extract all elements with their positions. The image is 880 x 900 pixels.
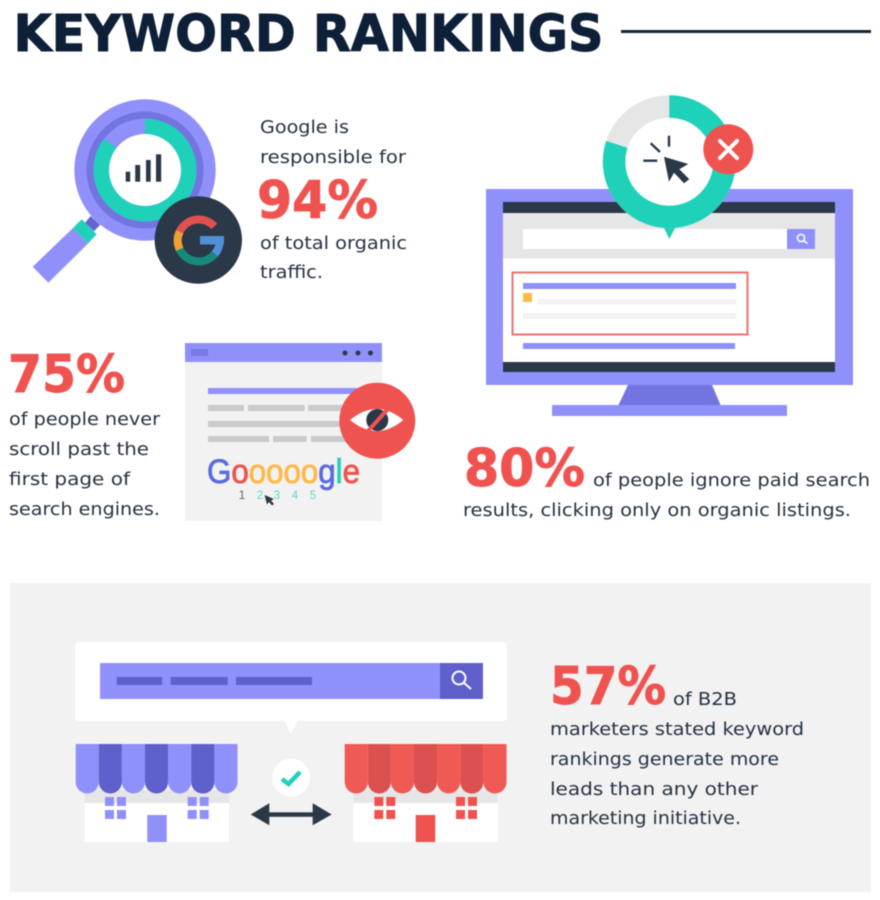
highlighted paid result [512, 272, 748, 334]
red storefront [345, 744, 506, 842]
red close badge [703, 124, 753, 174]
text block: 75% stat: 75% [8, 345, 125, 405]
bar chart glyph [126, 154, 161, 182]
text block: 57% stat: of B2B [673, 689, 737, 710]
browser header [185, 343, 382, 362]
small cursor [264, 495, 274, 506]
text block: 57% stat: marketing initiative. [550, 808, 741, 829]
text block: 75% stat: of people never [9, 409, 161, 430]
text block: 80% stat: 80% [464, 439, 585, 499]
text block: 94% stat: Google is [260, 117, 349, 138]
icon: browser window with pagination [185, 343, 415, 521]
text block: 75% stat: search engines. [9, 499, 160, 520]
double arrow [251, 803, 332, 825]
text block: 75% stat [8, 345, 161, 520]
text block: 94% stat: traffic. [260, 262, 323, 283]
cursor arrow [643, 136, 689, 183]
text block: 57% stat [550, 657, 804, 829]
browser body [185, 343, 382, 521]
panel background [10, 583, 871, 892]
text block: 75% stat: first page of [9, 469, 131, 490]
search speech bubble [75, 642, 507, 734]
magnifier handle [33, 216, 100, 283]
icon: monitor with search results [486, 189, 853, 416]
icon: magnifier with Google badge [33, 99, 242, 284]
text block: 80% stat: results, clicking only on organic listings. [463, 500, 851, 521]
page numbers [239, 490, 316, 502]
text block: 94% stat: of total organic [260, 233, 407, 254]
text block: 57% stat: rankings generate more [550, 749, 779, 770]
text block: 94% stat [257, 117, 407, 283]
organic result line [523, 343, 735, 349]
text block: 75% stat: scroll past the [9, 439, 149, 460]
text block: 80% stat: of people ignore paid search [593, 470, 870, 491]
monitor screen [503, 202, 835, 372]
text block: 94% stat: 94% [257, 171, 378, 231]
check badge [272, 759, 310, 797]
search field [523, 229, 815, 249]
panel: B2B keyword rankings [10, 583, 871, 892]
title rule [621, 30, 871, 33]
title: KEYWORD RANKINGS [14, 5, 604, 64]
result lines [208, 388, 363, 442]
page numbers: 2 [257, 490, 263, 502]
crossed-out eye badge [339, 383, 415, 459]
page numbers: 1 [239, 490, 245, 502]
purple storefront [76, 744, 238, 842]
magnifier lens [74, 99, 216, 241]
monitor stand [552, 385, 787, 416]
monitor frame [486, 189, 853, 385]
page numbers: 4 [292, 490, 299, 502]
text block: 80% stat [463, 439, 870, 521]
page numbers: 3 [274, 490, 280, 502]
page numbers: 5 [310, 490, 316, 502]
text block: 57% stat: 57% [550, 657, 666, 717]
text block: 57% stat: marketers stated keyword [550, 719, 804, 740]
Google badge [155, 196, 242, 284]
text block: 57% stat: leads than any other [550, 779, 759, 800]
icon: click donut pin [614, 106, 753, 239]
text block: 94% stat: responsible for [260, 147, 407, 168]
Gooooogle logo: Gooooogle [207, 453, 360, 491]
